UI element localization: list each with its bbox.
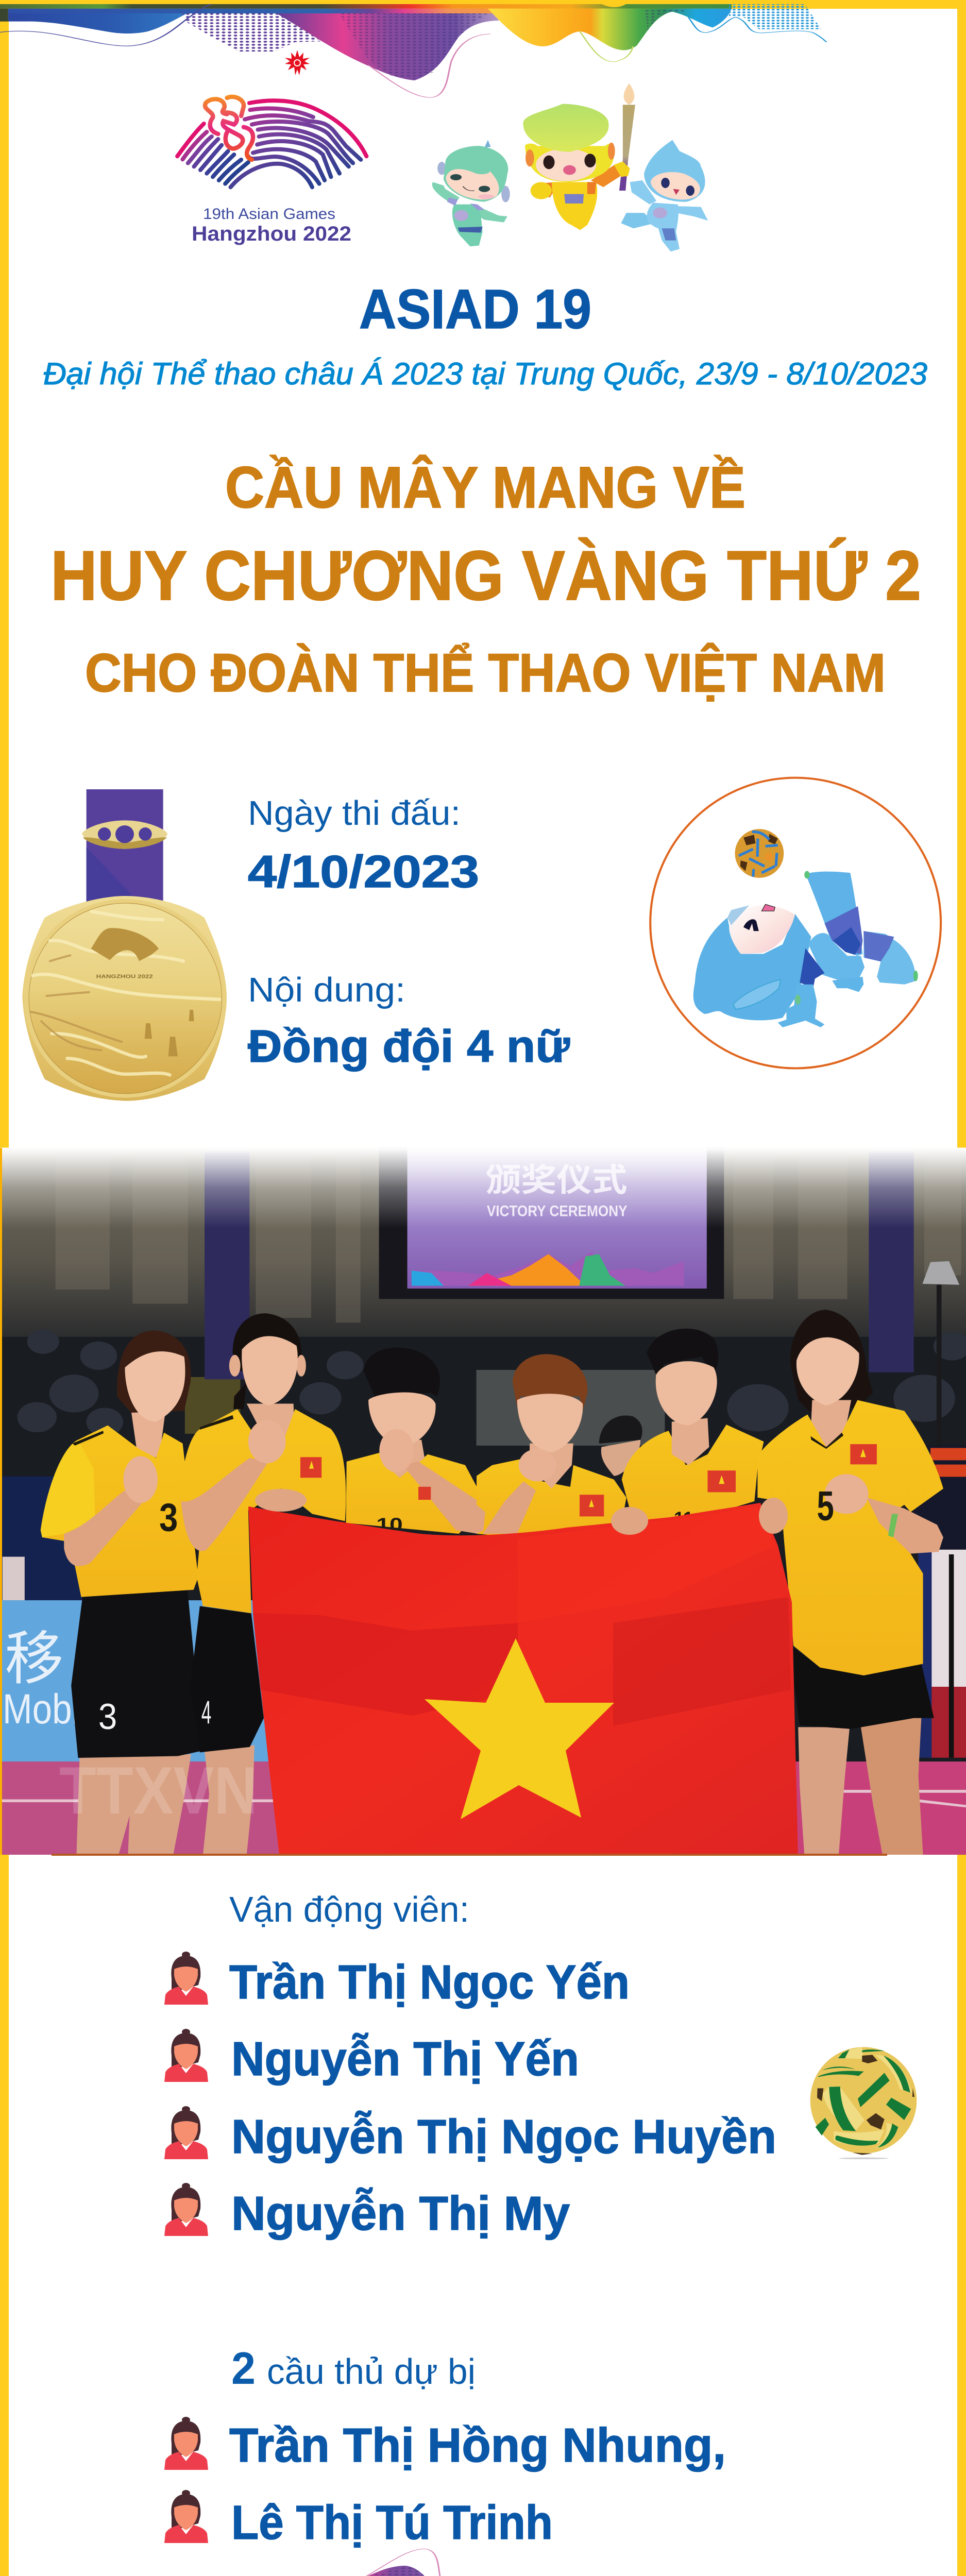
ball green strands	[816, 2049, 911, 2147]
medal ribbon	[87, 789, 163, 905]
mascot second leg	[863, 931, 917, 985]
mascot kicking ball in circle	[650, 778, 941, 1069]
ball base	[810, 2047, 917, 2154]
mascot: blue	[621, 140, 708, 251]
label: event: Nội dung:	[248, 971, 405, 1009]
hall pillars	[205, 1153, 249, 1379]
banner text: 移	[5, 1626, 64, 1691]
medal clasp	[82, 820, 167, 849]
flag star	[425, 1638, 614, 1819]
player 4	[477, 1354, 626, 1537]
value: event: Đồng đội 4 nữ	[248, 1021, 570, 1072]
player 3: 10	[376, 1514, 403, 1535]
mascot hip	[808, 933, 865, 980]
logo orange squiggle	[205, 97, 253, 160]
logo arcs	[177, 100, 366, 187]
bottom decorative waves	[43, 2549, 814, 2576]
player 1: 3	[159, 1496, 178, 1540]
medal sand waves	[32, 911, 220, 1075]
mascot arm	[778, 985, 824, 1027]
reserve 2: Lê Thị Tú Trinh	[231, 2496, 553, 2549]
icon: reserve 1	[164, 2417, 208, 2470]
sepak takraw ball small	[735, 829, 784, 878]
ball holes	[817, 2055, 914, 2155]
player 1: 3	[98, 1697, 117, 1737]
mascot torso	[800, 948, 824, 988]
screen colour wave	[412, 1252, 684, 1286]
reserve names	[229, 2418, 726, 2549]
photo left edge	[0, 1148, 2, 1855]
sponsor banner	[2, 1600, 270, 1761]
subheading: event dates: Đại hội Thể thao châu Á 2023 tại Trung Quốc, 23/9 - 8/10/2023	[43, 357, 927, 391]
heading: ASIAD 19: ASIAD 19	[359, 278, 591, 340]
value: match date: 4/10/2023	[248, 846, 479, 897]
medal disc	[22, 896, 227, 1101]
mascot: yellow with torch	[523, 83, 635, 230]
medal logo emblem	[91, 928, 159, 961]
icon: athlete 1	[164, 1952, 208, 2005]
label: match date: Ngày thi đấu:	[248, 794, 461, 833]
logo caption	[192, 206, 351, 245]
players left group	[41, 1313, 485, 1855]
title line 2: HUY CHƯƠNG VÀNG THỨ 2	[50, 536, 921, 615]
mascot raised leg	[805, 872, 862, 956]
medal pagodas	[145, 1010, 194, 1056]
mascot body	[693, 914, 811, 1020]
title line 3: CHO ĐOÀN THỂ THAO VIỆT NAM	[85, 642, 886, 703]
mascot other hand	[832, 977, 863, 992]
big screen	[408, 1148, 707, 1289]
name 4: Nguyễn Thị My	[231, 2187, 570, 2240]
player 5: 11	[674, 1508, 693, 1529]
player 5	[622, 1329, 764, 1529]
man behind team	[599, 1416, 642, 1476]
medal caption: HANGZHOU 2022	[96, 974, 153, 980]
player 2: 4	[201, 1694, 211, 1731]
big screen frame	[379, 1148, 724, 1299]
banner text	[3, 1626, 80, 1733]
icon: reserve 2	[164, 2490, 208, 2543]
arena floor	[2, 1761, 966, 1855]
athlete names	[229, 1955, 776, 2240]
hands holding flag	[255, 1489, 788, 1535]
label: athletes: Vận động viên:	[229, 1889, 469, 1929]
players right group	[477, 1310, 943, 1855]
photo background: VICTORY CEREMONY	[487, 1203, 628, 1220]
orange ring	[650, 778, 941, 1069]
label: reserve players	[231, 2343, 476, 2394]
top decorative waves	[0, 4, 826, 97]
title block	[50, 455, 921, 703]
photo: Vietnamese team with flag	[0, 1148, 966, 1856]
photo bottom edge	[52, 1854, 887, 1856]
ball light strands	[823, 2047, 912, 2148]
icon: sepak takraw ball	[810, 2047, 917, 2159]
camera stand right	[922, 1261, 966, 1477]
logo caption: Hangzhou 2022	[192, 223, 351, 245]
label: reserve players: 2	[231, 2343, 256, 2394]
title line 1: CẦU MÂY MANG VỀ	[225, 455, 745, 520]
player 2	[178, 1313, 346, 1855]
photo watermark: TTXVN	[59, 1753, 258, 1828]
player 3	[346, 1347, 485, 1535]
player 6: 5	[817, 1483, 834, 1529]
ball shadow	[839, 2158, 889, 2159]
player 6	[757, 1310, 943, 1855]
spectator in white at left	[3, 1557, 25, 1600]
name 2: Nguyễn Thị Yến	[231, 2032, 579, 2086]
icon: gold medal	[22, 789, 227, 1101]
player 1	[41, 1331, 203, 1855]
banner text: Mobi	[3, 1686, 80, 1733]
logo caption: 19th Asian Games	[203, 206, 335, 223]
photo background: 颁奖仪式	[485, 1162, 628, 1198]
mascot: green	[432, 140, 510, 246]
icon: athlete 4	[164, 2183, 208, 2236]
Vietnamese flag	[248, 1503, 798, 1855]
side panel right	[924, 1550, 966, 1687]
icon: red sun emblem	[285, 50, 310, 75]
label: reserve players: cầu thủ dự bị	[267, 2351, 476, 2392]
photo top fade	[0, 1148, 966, 1228]
icon: athlete 2	[164, 2029, 208, 2082]
icon: athlete 3	[164, 2106, 208, 2159]
reserve 1: Trần Thị Hồng Nhung,	[229, 2418, 726, 2472]
name 3: Nguyễn Thị Ngọc Huyền	[231, 2110, 776, 2163]
name 1: Trần Thị Ngọc Yến	[229, 1955, 630, 2009]
logo: Hangzhou 2022	[177, 97, 366, 187]
mascot face	[729, 905, 795, 954]
photo background	[0, 1148, 966, 1855]
